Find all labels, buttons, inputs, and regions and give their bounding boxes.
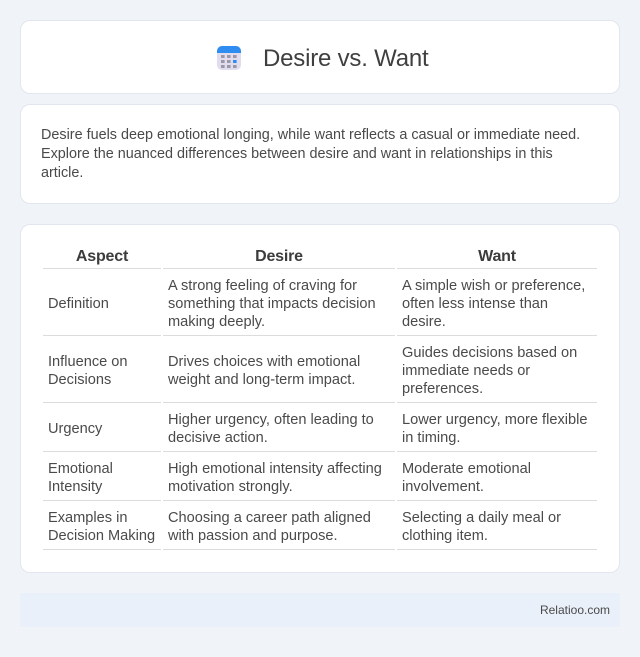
table header: Desire xyxy=(255,248,303,265)
row: urgency xyxy=(43,412,597,452)
row: examples in decision making: Examples in xyxy=(48,510,128,526)
title: Desire vs. Want xyxy=(263,45,428,72)
row: definition: A strong feeling of craving for xyxy=(168,278,357,294)
intro text xyxy=(41,127,580,181)
intro text: Desire fuels deep emotional longing, while want reflects a casual or immediate need. xyxy=(41,127,580,143)
row: emotional intensity: Emotional xyxy=(48,461,113,477)
row: definition xyxy=(43,278,597,336)
row: examples in decision making: clothing item. xyxy=(402,528,488,544)
row: emotional intensity: High emotional intensity affecting xyxy=(168,461,382,477)
row: emotional intensity: Moderate emotional xyxy=(402,461,531,477)
row: urgency: decisive action. xyxy=(168,430,268,446)
intro text: article. xyxy=(41,165,83,181)
row: examples in decision making: Choosing a career path aligned xyxy=(168,510,371,526)
row: definition: Definition xyxy=(48,296,109,312)
row: urgency: Higher urgency, often leading to xyxy=(168,412,374,428)
row: emotional intensity: involvement. xyxy=(402,479,484,495)
table header xyxy=(43,248,597,269)
panel: title card xyxy=(20,20,620,94)
row: influence on decisions: Guides decisions based on xyxy=(402,345,577,361)
row: definition: A simple wish or preference, xyxy=(402,278,585,294)
row: influence on decisions: Influence on xyxy=(48,354,128,370)
panel: introduction xyxy=(20,104,620,204)
row: influence on decisions: weight and long-term impact. xyxy=(168,372,355,388)
row: urgency: Urgency xyxy=(48,421,102,437)
row: examples in decision making: Decision Making xyxy=(48,528,155,544)
row: examples in decision making xyxy=(43,510,597,550)
footer credit: Relatioo.com xyxy=(540,603,610,617)
row: influence on decisions: Drives choices with emotional xyxy=(168,354,360,370)
row: examples in decision making: Selecting a daily meal or xyxy=(402,510,561,526)
row: definition: something that impacts decision xyxy=(168,296,376,312)
row: influence on decisions: Decisions xyxy=(48,372,111,388)
row: influence on decisions: preferences. xyxy=(402,381,483,397)
panel: comparison table xyxy=(20,224,620,573)
row: urgency: Lower urgency, more flexible xyxy=(402,412,587,428)
row: examples in decision making: with passion and purpose. xyxy=(168,528,338,544)
icon: calendar xyxy=(217,46,241,70)
table header: Aspect xyxy=(76,248,128,265)
row: influence on decisions xyxy=(43,345,597,403)
row: influence on decisions: immediate needs or xyxy=(402,363,530,379)
row: emotional intensity: motivation strongly. xyxy=(168,479,293,495)
row: emotional intensity xyxy=(43,461,597,501)
footer bar xyxy=(20,593,620,627)
row: definition: often less intense than xyxy=(402,296,548,312)
row: urgency: in timing. xyxy=(402,430,460,446)
intro text: Explore the nuanced differences between desire and want in relationships in this xyxy=(41,146,553,162)
row: emotional intensity: Intensity xyxy=(48,479,102,495)
row: definition: making deeply. xyxy=(168,314,265,330)
row: definition: desire. xyxy=(402,314,446,330)
table header: Want xyxy=(478,248,516,265)
